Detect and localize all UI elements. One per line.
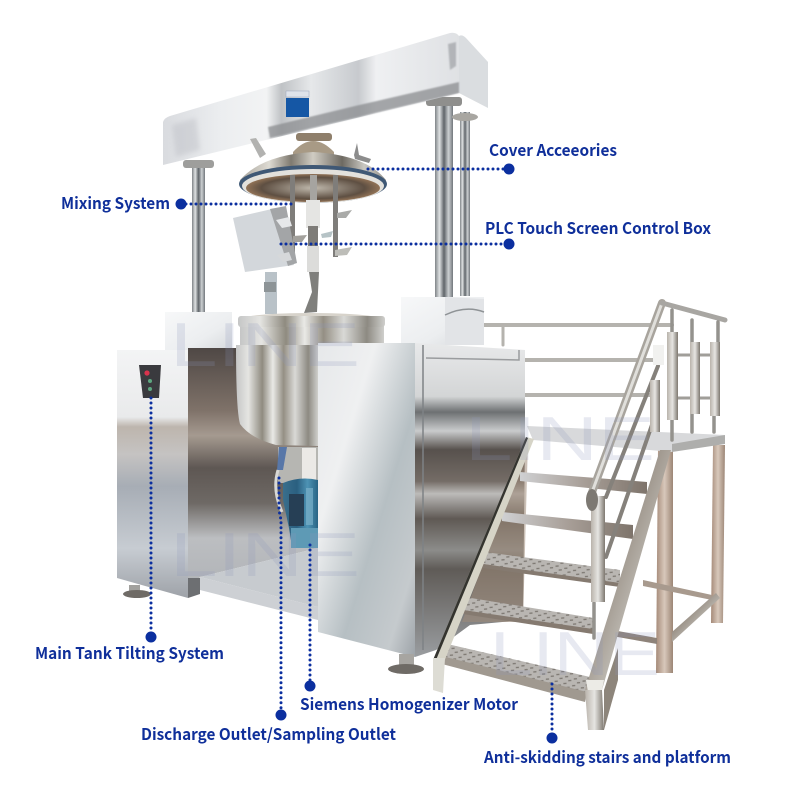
callout: anti-skidding stairs and platform bbox=[483, 684, 731, 768]
left stair stringer bbox=[433, 437, 534, 693]
nameplate bbox=[286, 91, 309, 117]
callout: PLC control box bbox=[281, 215, 711, 250]
callout: mixing system: Mixing System bbox=[61, 190, 170, 214]
mixer lid assembly bbox=[239, 133, 387, 203]
platform deck bbox=[527, 426, 725, 452]
callout: main tank tilting system: Main Tank Tilting System bbox=[35, 640, 224, 664]
mixing tank vessel bbox=[236, 345, 318, 446]
inner cabinet cavity bbox=[188, 348, 318, 598]
tank top flange bbox=[238, 313, 385, 346]
agitator paddles and shafts bbox=[290, 175, 352, 313]
callout: mixing system bbox=[61, 190, 293, 214]
callout: cover accessories bbox=[368, 137, 617, 174]
left cabinet panel bbox=[117, 350, 188, 598]
stair treads bbox=[442, 472, 647, 702]
homogenizer pipework bbox=[276, 447, 318, 512]
callout: discharge and sampling outlet: Discharge Outlet/Sampling Outlet bbox=[141, 721, 396, 745]
callout: PLC control box: PLC Touch Screen Control Box bbox=[485, 215, 711, 239]
illustration: mixing machine bbox=[117, 33, 725, 730]
callout: Siemens homogenizer motor: Siemens Homogenizer Motor bbox=[300, 691, 518, 715]
tilting control switch bbox=[139, 365, 161, 398]
callout: cover accessories: Cover Acceeories bbox=[489, 137, 617, 161]
front centre cabinet panel bbox=[318, 343, 415, 657]
callout: Siemens homogenizer motor bbox=[300, 545, 518, 715]
callout: discharge and sampling outlet bbox=[141, 478, 396, 745]
left machine foot bbox=[123, 585, 151, 598]
railing uprights bbox=[586, 332, 720, 602]
right machine foot bbox=[388, 654, 424, 674]
stair handrail bbox=[591, 303, 725, 638]
PLC control box bbox=[233, 206, 297, 314]
faint brand watermarks: LINE bbox=[465, 405, 655, 474]
cabinet floor plate bbox=[188, 548, 318, 620]
faint brand watermarks bbox=[170, 311, 660, 689]
overhead beam bbox=[163, 33, 488, 165]
left column base block bbox=[165, 312, 232, 352]
callout: main tank tilting system bbox=[35, 398, 224, 664]
right lifting columns bbox=[183, 97, 478, 298]
callout: anti-skidding stairs and platform: Anti-skidding stairs and platform bbox=[483, 744, 731, 768]
faint brand watermarks: LINE bbox=[170, 311, 360, 380]
platform legs and braces bbox=[612, 445, 725, 673]
right side cabinet panel bbox=[415, 343, 525, 657]
left lifting column bbox=[192, 160, 205, 314]
faint brand watermarks: LINE bbox=[490, 620, 660, 689]
Siemens motor bbox=[283, 479, 318, 548]
faint brand watermarks: LINE bbox=[170, 521, 360, 590]
right stair stringer bbox=[585, 450, 671, 730]
right column base block bbox=[401, 297, 484, 345]
rear platform railings bbox=[484, 325, 672, 395]
